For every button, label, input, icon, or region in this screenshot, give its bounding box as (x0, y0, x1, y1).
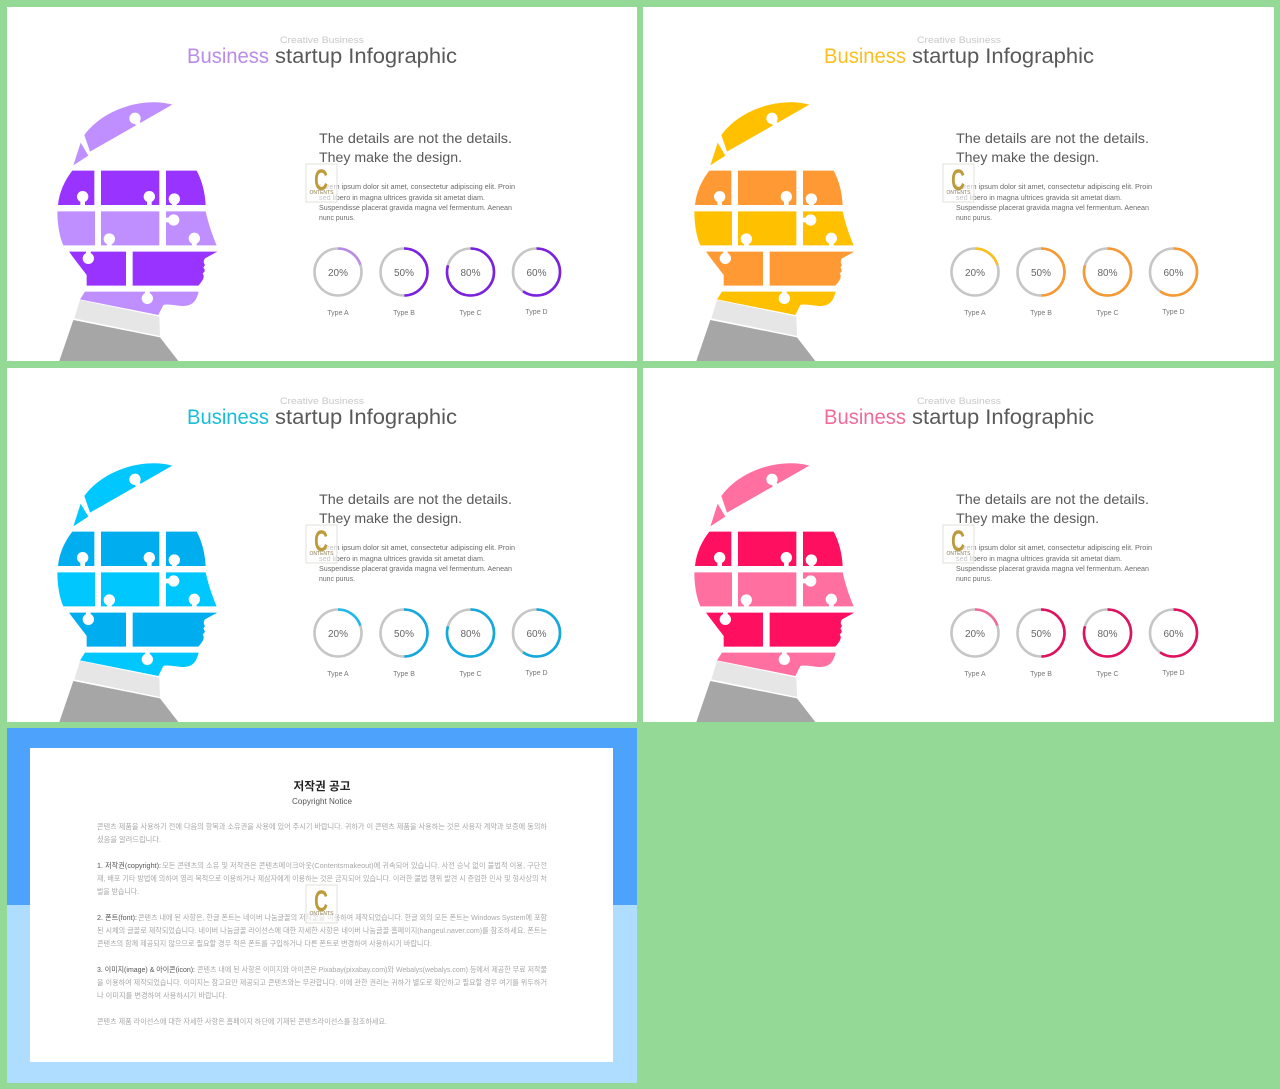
donut chart: type D: 60% (1163, 268, 1184, 279)
title: startup Infographic (912, 44, 1094, 68)
donut chart: type D: Type D (525, 309, 548, 316)
logo watermark (306, 525, 337, 563)
title: Business (824, 405, 906, 429)
text block: tagline: The details are not the details. (319, 130, 512, 146)
text block: clause 3 image and icon: 콘텐츠 내에 된 사항은 이미지와 아이콘은 Pixabay(pixabay.com)와 Webalys(webalys.com) 등에서 제공한 무료 저작물 (197, 964, 547, 974)
donut chart: type D: 60% (1163, 629, 1184, 640)
text block: body (319, 184, 515, 222)
icon: puzzle head (57, 463, 217, 722)
text block: intro: 셨음을 알려드립니다. (97, 834, 161, 844)
logo watermark (306, 164, 337, 202)
donut chart: type A (314, 610, 362, 678)
text block: tagline: The details are not the details. (319, 491, 512, 507)
text block: clause 3 image and icon: 나 이미지를 변경하여 사용하시기 바랍니다. (97, 990, 227, 1000)
icon: puzzle head (694, 102, 854, 361)
heading: creative business: Creative Business (280, 35, 364, 46)
donut chart: type A: 20% (965, 268, 985, 279)
panel: purple slide (7, 7, 637, 361)
donut chart: type A: 20% (328, 268, 348, 279)
text block: clause 1 copyright: 모든 콘텐츠의 소유 및 저작권은 콘텐츠메이크아웃(Contentsmakeout)에 귀속되어 있습니다. 사전 승낙 없이 불법적 이용, 구단전 (162, 860, 547, 870)
title: Business (187, 405, 269, 429)
donut chart: type A: 20% (965, 629, 985, 640)
donut chart: type B: 50% (1031, 629, 1051, 640)
donut chart: type B: Type B (393, 310, 415, 317)
text block: clause 3 image and icon (97, 964, 547, 1000)
title: startup Infographic (912, 405, 1094, 429)
text block: body: Suspendisse placerat gravida magna vel fermentum. Aenean (956, 566, 1149, 573)
text block: tagline (319, 491, 512, 526)
text block: tagline: They make the design. (956, 510, 1099, 526)
donut chart: type A: Type A (327, 671, 349, 678)
donut chart: type B (1018, 610, 1064, 678)
logo watermark: ONTENTS (947, 190, 971, 196)
text block: tagline (319, 130, 512, 165)
text block: body: nunc purus. (956, 215, 992, 222)
heading: copyright subtitle: Copyright Notice (292, 797, 353, 806)
donut chart: type D (1150, 248, 1197, 316)
title: startup Infographic (275, 44, 457, 68)
donut chart: type C: 80% (460, 268, 481, 279)
panel: pink slide (643, 368, 1274, 722)
donut chart: type B: Type B (1030, 671, 1052, 678)
text block: clause 1 copyright (97, 860, 547, 896)
donut chart: type B: 50% (1031, 268, 1051, 279)
logo watermark (943, 525, 974, 563)
logo watermark (306, 885, 337, 923)
title: startup Infographic (275, 405, 457, 429)
text block: body: Lorem ipsum dolor sit amet, consectetur adipiscing elit. Proin (319, 184, 515, 191)
donut chart: type C (447, 248, 494, 317)
logo watermark: C (314, 164, 328, 197)
donut chart: type D (1150, 610, 1197, 677)
logo watermark: C (314, 885, 328, 918)
text block: clause 2 font: 콘텐츠 내에 된 사항은, 한글 폰트는 네이버 나눔글꼴의 저작물을 이용하여 제작되었습니다. 한글 외의 모든 폰트는 Windows System에 포함 (138, 912, 547, 922)
text block: license note: 콘텐츠 제품 라이선스에 대한 자세한 사항은 홈페이지 하단에 기재된 콘텐츠라이선스를 참조하세요. (97, 1016, 387, 1026)
icon: puzzle head (57, 102, 217, 361)
donut chart: type A (952, 248, 998, 317)
donut chart: type D: 60% (526, 268, 547, 279)
donut chart: type C: Type C (1096, 310, 1119, 317)
text block: body: nunc purus. (956, 576, 992, 583)
text block: clause 2 font: 된 시체의 글꼴로 제작되었습니다. 네이버 나눔글꼴 라이선스에 대한 자세한 사항은 네이버 나눔글꼴 홈페이지(hangeul.naver.com)를 참조하세요. 폰트는 (97, 925, 547, 935)
text block: body: Lorem ipsum dolor sit amet, consectetur adipiscing elit. Proin (956, 545, 1152, 552)
text block: clause 3 image and icon: 3. 이미지(image) & 아이콘(icon): (97, 964, 195, 974)
donut chart: type C: Type C (459, 310, 482, 317)
text block: clause 2 font: 콘텐츠의 함께 제공되지 않으므로 필요할 경우 적은 폰트를 구입하거나 다른 폰트로 변경하여 사용하시기 바랍니다. (97, 938, 432, 948)
text block: clause 1 copyright: 재, 배포 기타 방법에 의하여 영리 목적으로 이용하거나 제삼자에게 이용하는 것은 금지되어 있습니다. 이러한 불법 행위 발견 시 준엄한 민사 및 형사상의 처 (97, 873, 547, 883)
heading: creative business: Creative Business (280, 396, 364, 407)
donut chart: type A: 20% (328, 629, 348, 640)
panel: orange slide (643, 7, 1274, 361)
donut chart: type B: Type B (393, 671, 415, 678)
title (824, 44, 1094, 68)
donut chart: type C: Type C (1096, 671, 1119, 678)
logo watermark: ONTENTS (947, 551, 971, 557)
donut chart: type B (1018, 248, 1064, 317)
panel: blue slide (7, 368, 637, 722)
text block: clause 1 copyright: 1. 저작권(copyright): (97, 860, 161, 870)
text block: tagline: The details are not the details. (956, 491, 1149, 507)
text block: clause 3 image and icon: 을 이용하여 제작되었습니다. 이미지는 참고요만 제공되고 콘텐츠와는 무관합니다. 이에 관한 권리는 귀하가 별도로 확인하고 필요할 경우 여기를 위두하거 (97, 977, 547, 987)
text block: intro (97, 821, 547, 844)
donut chart: type C: Type C (459, 671, 482, 678)
heading: creative business: Creative Business (917, 35, 1001, 46)
text block: body (319, 545, 515, 583)
donut chart: type D: 60% (526, 629, 547, 640)
text block: tagline (956, 130, 1149, 165)
donut chart: type D (513, 248, 560, 316)
donut chart: type A: Type A (964, 671, 986, 678)
donut chart: type D: Type D (1162, 670, 1185, 677)
text block: tagline: They make the design. (956, 149, 1099, 165)
text block: intro: 콘텐츠 제품을 사용하기 전에 다음의 항목과 소유권을 사용에 있어 주시기 바랍니다. 귀하가 이 콘텐츠 제품을 사용하는 것은 사용자 계약과 보증에 동의하 (97, 821, 547, 831)
text block: tagline: They make the design. (319, 149, 462, 165)
text block: body: Lorem ipsum dolor sit amet, consectetur adipiscing elit. Proin (956, 184, 1152, 191)
donut chart: type D: Type D (525, 670, 548, 677)
donut chart: type D (513, 610, 560, 677)
text block: body: sed libero in magna ultrices gravida sit ametat diam. (319, 556, 485, 563)
text block: body: sed libero in magna ultrices gravida sit ametat diam. (319, 195, 485, 202)
text block: body: Suspendisse placerat gravida magna vel fermentum. Aenean (956, 205, 1149, 212)
text block: body: Suspendisse placerat gravida magna vel fermentum. Aenean (319, 205, 512, 212)
donut chart: type A: Type A (327, 310, 349, 317)
text block: body (956, 184, 1152, 222)
donut chart: type B (380, 610, 428, 678)
text block: body: Lorem ipsum dolor sit amet, consectetur adipiscing elit. Proin (319, 545, 515, 552)
logo watermark: ONTENTS (310, 190, 334, 196)
text block: body: nunc purus. (319, 215, 355, 222)
text block: body: nunc purus. (319, 576, 355, 583)
title (187, 405, 457, 429)
text block: body: Suspendisse placerat gravida magna vel fermentum. Aenean (319, 566, 512, 573)
heading: copyright title: 저작권 공고 (294, 779, 351, 793)
logo watermark: C (951, 525, 965, 558)
panel: copyright notice (7, 728, 637, 1083)
donut chart: type C: 80% (460, 629, 481, 640)
text block: body (956, 545, 1152, 583)
donut chart: type C: 80% (1097, 268, 1118, 279)
donut chart: type A (314, 248, 362, 317)
text block: clause 1 copyright: 벌을 받습니다. (97, 886, 139, 896)
donut chart: type B: Type B (1030, 310, 1052, 317)
donut chart: type A (952, 610, 998, 678)
title: Business (187, 44, 269, 68)
text block: tagline: They make the design. (319, 510, 462, 526)
donut chart: type C (447, 610, 494, 678)
logo watermark: C (951, 164, 965, 197)
text block: body: sed libero in magna ultrices gravida sit ametat diam. (956, 195, 1122, 202)
logo watermark: ONTENTS (310, 551, 334, 557)
title (187, 44, 457, 68)
donut chart: type B (380, 248, 428, 317)
text block: clause 2 font: 2. 폰트(font): (97, 913, 137, 922)
heading: creative business: Creative Business (917, 396, 1001, 407)
logo watermark: C (314, 525, 328, 558)
icon: puzzle head (694, 463, 854, 722)
logo watermark: ONTENTS (310, 911, 334, 917)
text block: tagline: The details are not the details. (956, 130, 1149, 146)
donut chart: type C (1084, 248, 1131, 317)
text block: tagline (956, 491, 1149, 526)
donut chart: type C: 80% (1097, 629, 1118, 640)
text block: clause 2 font (97, 912, 547, 948)
title: Business (824, 44, 906, 68)
title (824, 405, 1094, 429)
logo watermark (943, 164, 974, 202)
donut chart: type C (1084, 610, 1131, 678)
donut chart: type D: Type D (1162, 309, 1185, 316)
donut chart: type B: 50% (394, 268, 414, 279)
donut chart: type B: 50% (394, 629, 414, 640)
text block: body: sed libero in magna ultrices gravida sit ametat diam. (956, 556, 1122, 563)
donut chart: type A: Type A (964, 310, 986, 317)
